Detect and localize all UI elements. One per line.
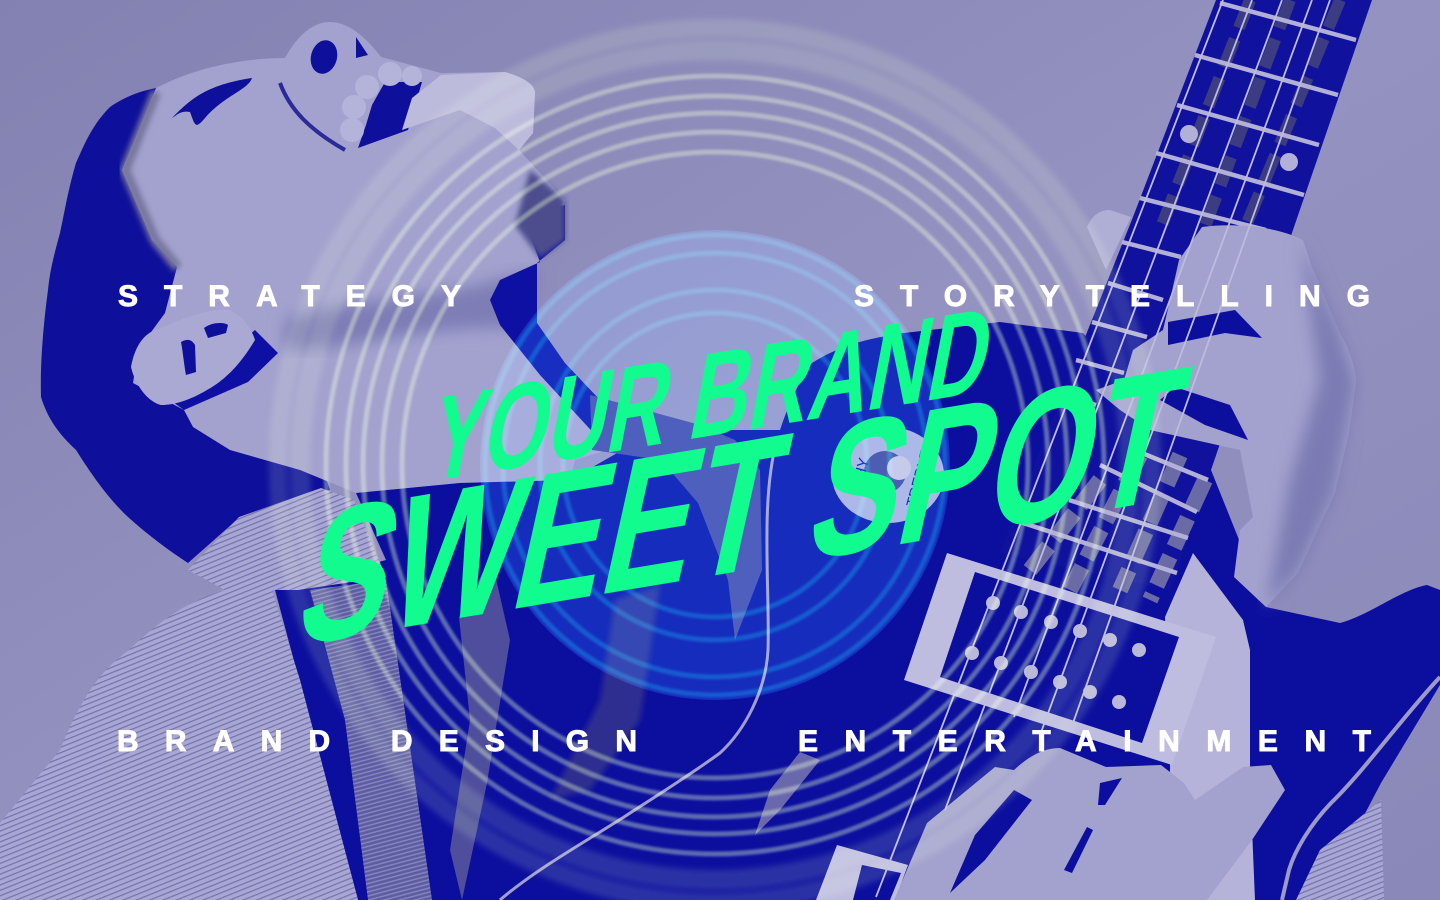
face and neck xyxy=(122,22,640,493)
pickguard xyxy=(1165,553,1255,900)
toggle labels: RHY xyxy=(848,456,873,491)
frets xyxy=(1014,3,1356,573)
small stain xyxy=(755,752,820,835)
label: storytelling: STORYTELLING xyxy=(854,280,1370,313)
hand shading xyxy=(1266,240,1356,607)
pickup frame xyxy=(904,553,1216,765)
jacket collar right xyxy=(590,395,762,640)
shirt and guitar body base xyxy=(275,322,1440,900)
guitar edge highlight xyxy=(1282,677,1440,900)
fret dots xyxy=(1180,125,1198,143)
toggle labels: TREBLE xyxy=(903,448,935,509)
jacket lapel xyxy=(310,580,432,900)
ear xyxy=(131,310,255,405)
inner grooves xyxy=(485,235,945,695)
mouth xyxy=(358,82,422,148)
label: entertainment: ENTERTAINMENT xyxy=(798,725,1371,758)
outer grooves xyxy=(326,76,1104,854)
fretting hand xyxy=(1096,225,1356,607)
jacket collar xyxy=(188,488,386,590)
record centre xyxy=(480,230,950,700)
guitar lead xyxy=(500,440,777,900)
jacket hem at right xyxy=(1296,800,1384,900)
strings xyxy=(876,0,1330,897)
label: brand design: BRAND DESIGN xyxy=(117,725,637,758)
nostril xyxy=(307,37,341,77)
blue shade behind ear xyxy=(170,330,278,410)
shirt grey streak centre xyxy=(550,585,660,800)
toggle ring xyxy=(864,451,906,493)
nose crease xyxy=(280,83,345,150)
eye socket xyxy=(172,78,252,125)
vinyl record rings xyxy=(278,28,1152,900)
toggle tip xyxy=(887,456,911,480)
title line: your brand: YOUR BRAND xyxy=(420,280,1004,508)
toggle switch plate xyxy=(832,427,944,523)
nose shadow xyxy=(356,37,368,58)
tongue xyxy=(402,72,535,150)
jaw dark edge xyxy=(515,170,565,258)
lower pickguard plate xyxy=(816,845,908,900)
pickup centre xyxy=(940,572,1179,743)
jaw and neck shading xyxy=(285,270,540,350)
jacket sleeve xyxy=(0,590,358,900)
thumb xyxy=(1087,210,1131,270)
guitar neck xyxy=(1000,0,1372,590)
fretboard upper wood texture xyxy=(1160,0,1340,240)
hairline shading xyxy=(125,92,178,268)
teeth xyxy=(340,62,422,142)
illustration: guitar xyxy=(500,0,1440,900)
throat shadow xyxy=(490,205,640,440)
pickup poles xyxy=(965,596,1146,709)
toggle labels xyxy=(848,448,935,509)
ear canal xyxy=(181,323,228,375)
hair xyxy=(41,88,330,563)
picking hand xyxy=(894,748,1285,900)
outer haze bands xyxy=(278,28,1152,900)
fretboard lower wood texture xyxy=(1030,455,1205,600)
picking hand finger gaps xyxy=(950,778,1122,893)
label: strategy: STRATEGY xyxy=(118,280,461,313)
shirt grey streak left xyxy=(450,557,510,900)
finger gap lower xyxy=(1160,387,1248,440)
finger gap upper xyxy=(1168,310,1262,345)
plate cutout xyxy=(853,865,901,900)
